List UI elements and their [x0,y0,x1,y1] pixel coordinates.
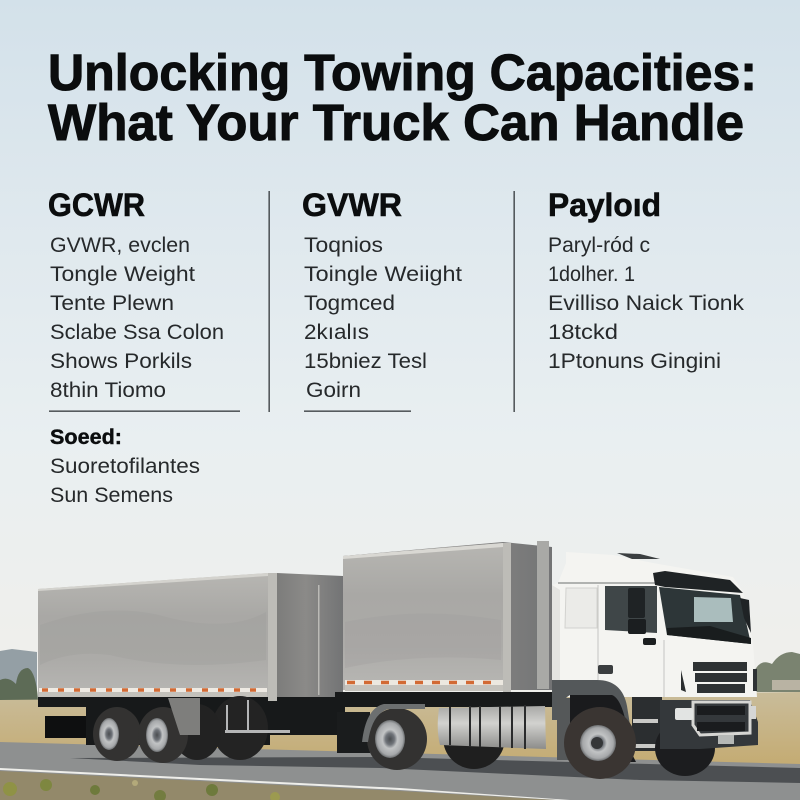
heading: GCWR: GCWR [48,187,145,223]
trailer side panel [38,573,268,697]
text block: Payload list: 1dolher. 1 [548,262,635,286]
windshield [659,587,751,644]
reflective strip [345,680,503,691]
title: Unlocking Towing Capacities: [48,44,757,101]
side window [605,586,657,633]
rear wheels [93,696,268,763]
cab [552,552,758,779]
roof fairing [617,553,660,559]
panel: GCWR column [48,187,240,412]
title [48,44,757,151]
text block: Payload list: Evilliso Naick Tionk [548,291,744,315]
text block: Payload list [548,233,744,373]
landscape: hills, trees and field [0,649,800,766]
panel: Speed note: Soeed: [50,426,122,449]
reflective strip [39,688,267,697]
text block: GCWR list: Tongle Weight [50,262,195,286]
heading: Payload: Payloıd [548,187,661,223]
mirrors [628,588,751,645]
text block: GVWR list: 15bniez Tesl [304,349,427,373]
text block: GVWR list: Toqnios [304,233,383,257]
front box [335,542,565,753]
mudguard [168,698,200,735]
grille [681,662,757,693]
panel: Speed note: Sun Semens [50,483,173,507]
text block: GCWR list: 8thin Tiomo [50,378,166,402]
trailer rear panel [268,573,343,697]
text block: GVWR list: Togmced [304,291,395,315]
bumper [660,700,758,749]
grass verge [0,771,555,800]
exhaust stack [537,541,549,689]
title: What Your Truck Can Handle [48,94,744,151]
truck [38,541,758,779]
heading: GVWR: GVWR [302,187,402,223]
text block: GCWR list: GVWR, evclen [50,233,190,257]
text block: GCWR list [50,233,224,402]
fender and lower cab [552,680,634,750]
panel: GVWR column [302,187,462,412]
rear trailer [38,573,345,763]
text block: GVWR list: Toingle Weiight [304,262,462,286]
fuel tank [438,705,546,749]
text block: GVWR list: 2kıalıs [304,320,369,344]
panel: Speed note: Suoretofilantes [50,454,200,478]
text block: Payload list: 18tckd [548,320,618,344]
front wheels [564,707,715,779]
text block: GCWR list: Sclabe Ssa Colon [50,320,224,344]
sun visor [653,571,743,593]
drive and tag wheels [362,704,505,770]
text block: GCWR list: Tente Plewn [50,291,174,315]
text block: GVWR list [304,233,462,402]
panel: Payload column [548,187,744,373]
text block: GCWR list: Shows Porkils [50,349,192,373]
chassis and undercarriage [38,697,345,745]
cab body [552,552,757,697]
panel: Speed note [50,426,200,507]
text block: GVWR list: Goirn [306,378,361,402]
road [0,742,800,800]
text block: Payload list: 1Ptonuns Gingini [548,349,721,373]
text block: Payload list: Paryl-ród c [548,233,650,257]
